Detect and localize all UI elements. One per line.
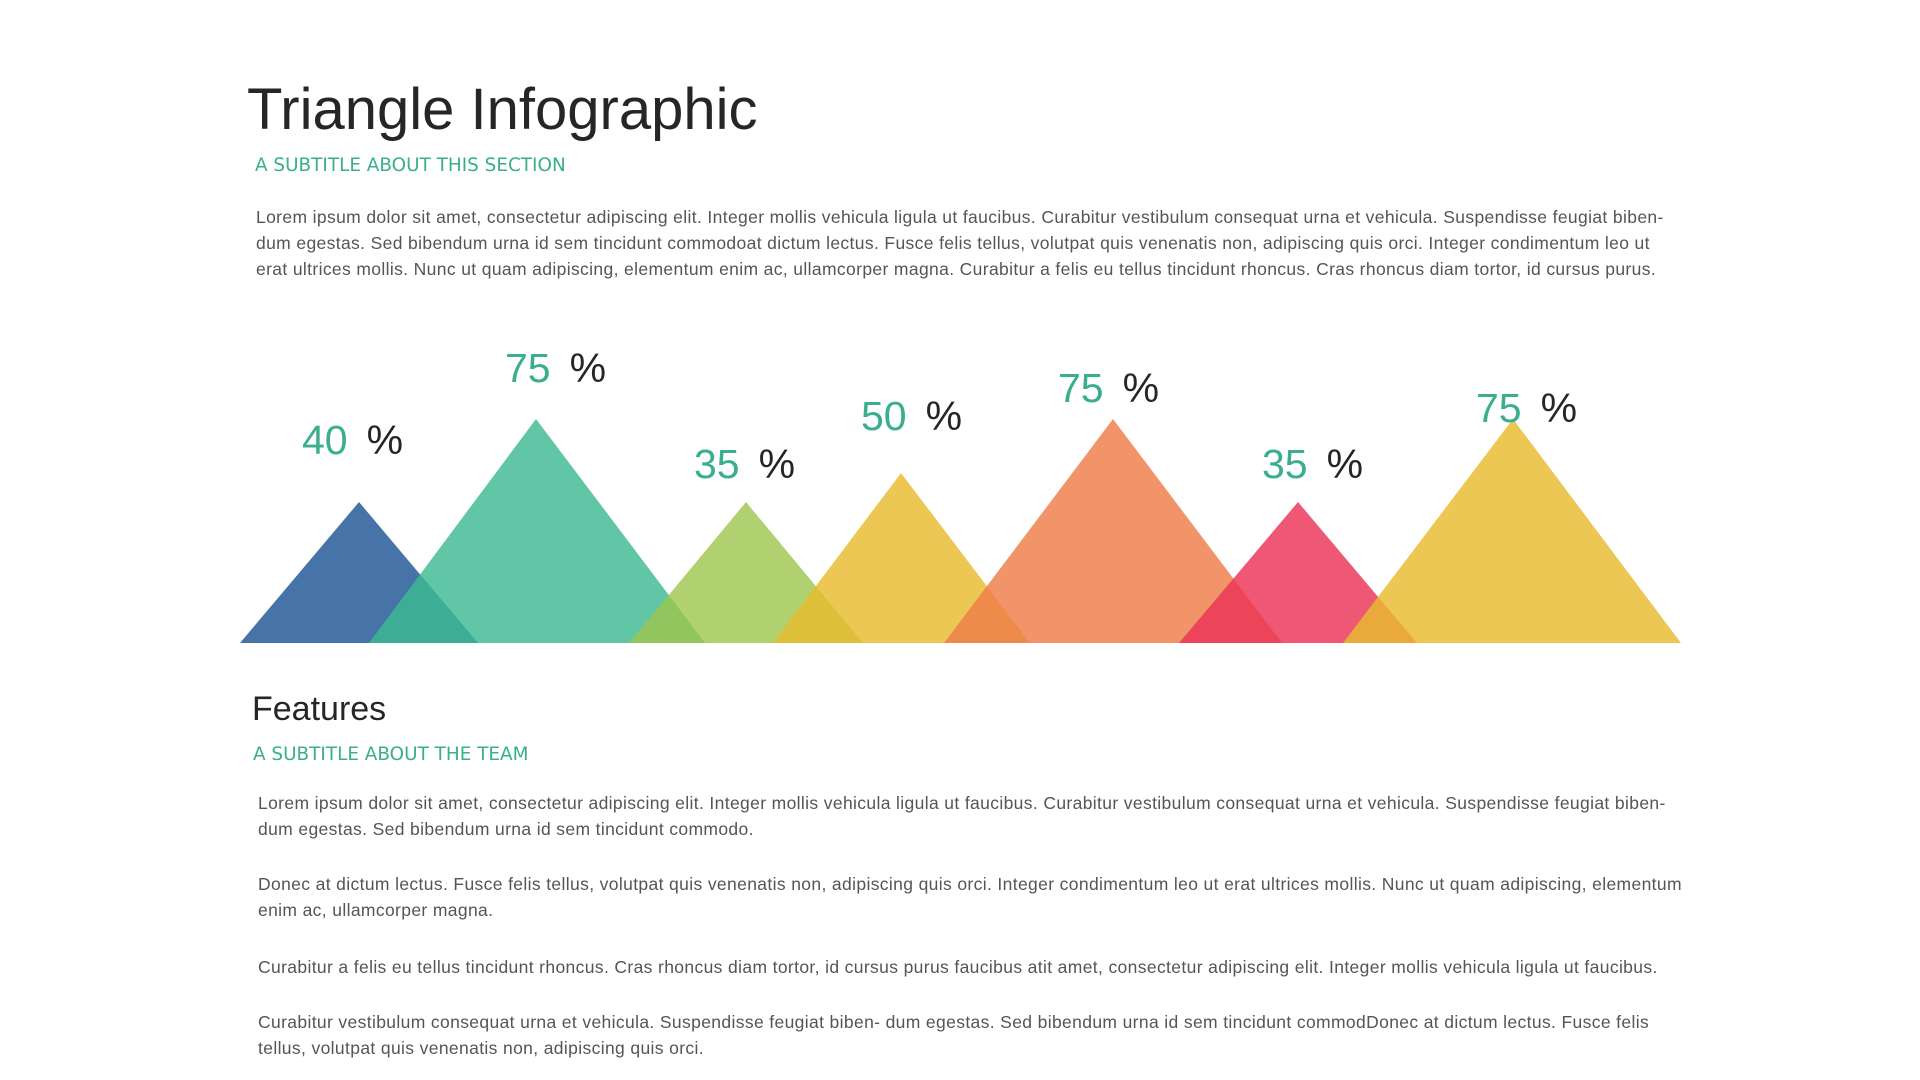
- intro paragraph: erat ultrices mollis. Nunc ut quam adipiscing, elementum enim ac, ullamcorper magna. Curabitur a felis eu tellus tincidunt rhoncus. Cras rhoncus diam tortor, id cursus purus.: [256, 259, 1656, 279]
- features paragraph 2: enim ac, ullamcorper magna.: [258, 900, 493, 920]
- features paragraph 1: Lorem ipsum dolor sit amet, consectetur adipiscing elit. Integer mollis vehicula ligula ut faucibus. Curabitur vestibulum consequat urna et vehicula. Suspendisse feugiat biben-: [258, 793, 1666, 813]
- features paragraph 3: Curabitur a felis eu tellus tincidunt rhoncus. Cras rhoncus diam tortor, id cursus purus faucibus atit amet, consectetur adipiscing elit. Integer mollis vehicula ligula ut faucibus.: [258, 957, 1658, 977]
- features paragraph 2: [258, 874, 1682, 920]
- features paragraph 1: dum egestas. Sed bibendum urna id sem tincidunt commodo.: [258, 819, 754, 839]
- triangle: yellow 75%: [1343, 419, 1681, 643]
- label 75%: 75 %: [505, 345, 606, 391]
- features paragraph 4: tellus, volutpat quis venenatis non, adipiscing quis orci.: [258, 1038, 704, 1058]
- intro paragraph: dum egestas. Sed bibendum urna id sem tincidunt commodoat dictum lectus. Fusce felis tellus, volutpat quis venenatis non, adipiscing quis orci. Integer condimentum leo ut: [256, 233, 1650, 253]
- features paragraph 4: [258, 1012, 1649, 1058]
- features subtitle: A SUBTITLE ABOUT THE TEAM: [253, 744, 529, 765]
- triangle: teal 75%: [369, 419, 705, 643]
- features paragraph 4: Curabitur vestibulum consequat urna et vehicula. Suspendisse feugiat biben- dum egestas. Sed bibendum urna id sem tincidunt commodDonec at dictum lectus. Fusce felis: [258, 1012, 1649, 1032]
- triangle: green 35%: [629, 502, 863, 643]
- label 35% b: 35 %: [1262, 441, 1363, 487]
- features paragraph 2: Donec at dictum lectus. Fusce felis tellus, volutpat quis venenatis non, adipiscing quis orci. Integer condimentum leo ut erat ultrices mollis. Nunc ut quam adipiscing, elementum: [258, 874, 1682, 894]
- features heading: Features: [252, 690, 386, 728]
- label 40%: 40 %: [302, 417, 403, 463]
- label 35%: 35 %: [694, 441, 795, 487]
- subtitle: A SUBTITLE ABOUT THIS SECTION: [255, 155, 566, 176]
- intro paragraph: Lorem ipsum dolor sit amet, consectetur adipiscing elit. Integer mollis vehicula ligula ut faucibus. Curabitur vestibulum consequat urna et vehicula. Suspendisse feugiat biben-: [256, 207, 1664, 227]
- title: Triangle Infographic: [247, 77, 757, 142]
- triangle: blue 40%: [240, 502, 478, 643]
- label 75% c: 75 %: [1476, 385, 1577, 431]
- triangle: red 35%: [1179, 502, 1417, 643]
- label 75% b: 75 %: [1058, 365, 1159, 411]
- intro paragraph: [256, 207, 1664, 279]
- triangle: yellow 50%: [773, 473, 1030, 643]
- features paragraph 1: [258, 793, 1666, 839]
- label 50%: 50 %: [861, 393, 962, 439]
- triangle: orange 75%: [944, 419, 1282, 643]
